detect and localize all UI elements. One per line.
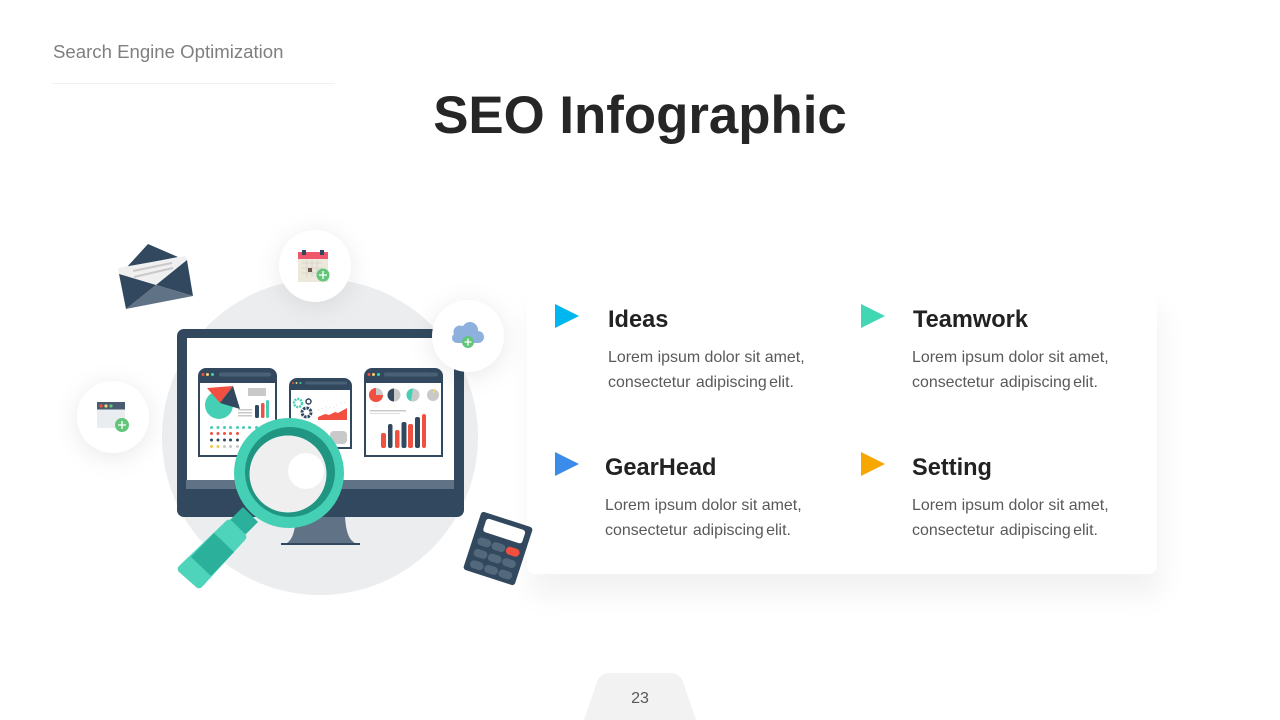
- feature: Ideas: Lorem ipsum dolor sit amet, consectetur adipiscing elit.: [608, 348, 805, 390]
- feature: Setting: Lorem ipsum dolor sit amet, consectetur adipiscing elit.: [912, 496, 1109, 538]
- icon: browser badge: [77, 381, 149, 453]
- icon: cloud badge: [432, 300, 504, 372]
- feature: GearHead: Lorem ipsum dolor sit amet, consectetur adipiscing elit.: [605, 496, 802, 538]
- dashboard window: donuts and bars: [364, 368, 443, 457]
- feature: GearHead: GearHead: [605, 454, 716, 480]
- feature: GearHead: [555, 452, 802, 538]
- background circle: [162, 279, 478, 595]
- icon: envelope: [118, 244, 193, 309]
- icon: blue arrow: [555, 452, 579, 476]
- magnifying glass: [178, 418, 344, 588]
- feature: Setting: [861, 452, 1109, 538]
- icon: blue arrow: [555, 304, 579, 328]
- feature: Setting: Setting: [912, 454, 992, 480]
- feature: Ideas: [555, 304, 805, 390]
- feature: Ideas: Ideas: [608, 306, 668, 332]
- title: SEO Infographic: [433, 86, 847, 145]
- monitor: [177, 329, 464, 545]
- feature: Teamwork: [861, 304, 1109, 390]
- panel: features: [527, 285, 1157, 574]
- dashboard window: gears and area chart: [289, 378, 352, 449]
- icon: teal arrow: [861, 304, 885, 328]
- feature: Teamwork: Teamwork: [913, 306, 1028, 332]
- feature: Teamwork: Lorem ipsum dolor sit amet, consectetur adipiscing elit.: [912, 348, 1109, 390]
- icon: orange arrow: [861, 452, 885, 476]
- dashboard window: pie chart: [198, 368, 277, 457]
- page number tab: [584, 673, 696, 720]
- page number tab: 23: [631, 690, 649, 707]
- icon: calendar badge: [279, 230, 351, 302]
- icon: calculator: [463, 511, 533, 586]
- section label: Search Engine Optimization: [53, 41, 283, 62]
